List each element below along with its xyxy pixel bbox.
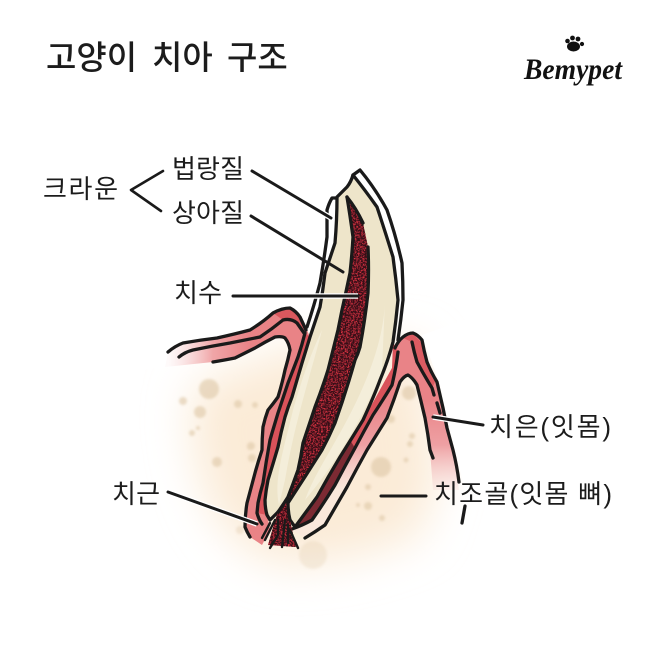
- title: 고양이: [46, 39, 137, 76]
- label: 치은(잇몸): [433, 412, 611, 442]
- gum: left: [165, 308, 310, 545]
- label: 치근: [112, 479, 257, 524]
- title: 치아: [152, 39, 213, 76]
- label: 치수: 치수: [174, 278, 222, 308]
- bone spots: [179, 379, 416, 569]
- label: 크라운 with bracket: 크라운: [43, 174, 118, 204]
- label: 치근: 치근: [112, 479, 160, 509]
- label: 법랑질: [172, 154, 331, 218]
- label: 치조골(잇몸 뼈): 치조골(잇몸 뼈): [434, 479, 612, 509]
- gum right red band: [292, 342, 398, 528]
- icon: paw: [565, 36, 584, 52]
- label: 상아질: [172, 198, 343, 272]
- tooth: enamel: [307, 170, 403, 340]
- tooth: dentin: [265, 175, 398, 527]
- title: 구조: [227, 39, 288, 76]
- tooth: pulp: [268, 197, 368, 547]
- jaw bone background: [130, 300, 520, 569]
- gum: right: [292, 333, 465, 538]
- logo: Bemypet: Bemypet: [523, 53, 624, 86]
- label: 치은(잇몸): 치은(잇몸): [489, 412, 611, 442]
- label: 크라운 with bracket: [43, 171, 163, 211]
- label: 상아질: 상아질: [172, 198, 244, 228]
- gum left red band: [257, 333, 310, 515]
- logo: Bemypet: [523, 36, 624, 86]
- root nerves: [262, 520, 298, 548]
- label: 법랑질: 법랑질: [172, 154, 244, 184]
